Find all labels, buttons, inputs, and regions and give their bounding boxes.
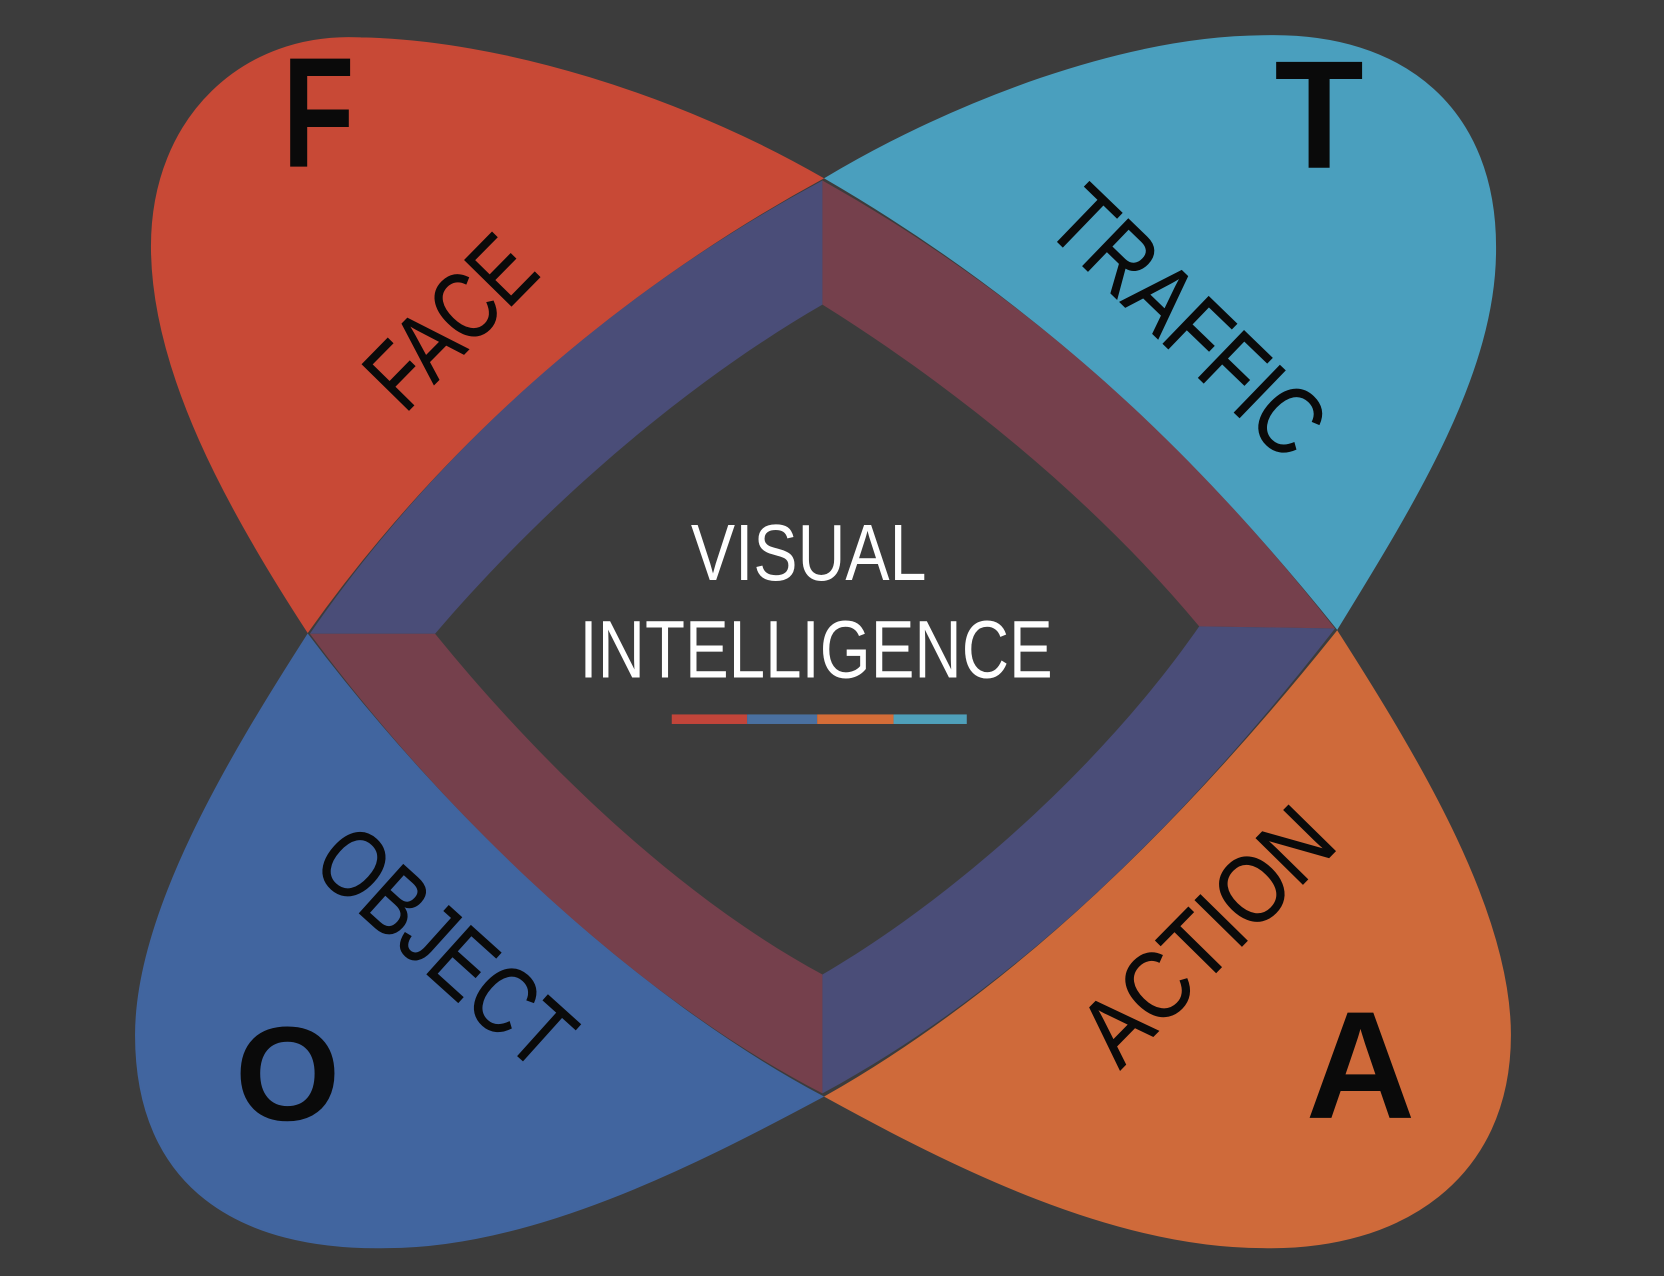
overlap band: top right: [822, 180, 1335, 628]
overlap band: top left: [310, 180, 822, 634]
label TRAFFIC: TRAFFIC: [1028, 166, 1346, 478]
letter A: A: [1306, 981, 1415, 1151]
petal: traffic: [826, 29, 1495, 628]
label FACE: FACE: [344, 215, 557, 429]
letter O: O: [235, 1000, 340, 1149]
petal: object: [136, 635, 822, 1247]
overlap band: bottom left: [310, 634, 822, 1093]
label OBJECT: OBJECT: [295, 805, 595, 1090]
petal: face: [152, 26, 822, 632]
overlap band: bottom right: [822, 626, 1335, 1093]
title line: INTELLIGENCE: INTELLIGENCE: [579, 604, 1053, 695]
letter T: T: [1275, 29, 1364, 201]
center title: [579, 508, 1053, 695]
title line: VISUAL: VISUAL: [691, 508, 926, 597]
letter F: F: [282, 26, 354, 201]
four-color divider bar: [672, 714, 967, 724]
label ACTION: ACTION: [1059, 787, 1355, 1085]
petal: action: [826, 632, 1510, 1247]
